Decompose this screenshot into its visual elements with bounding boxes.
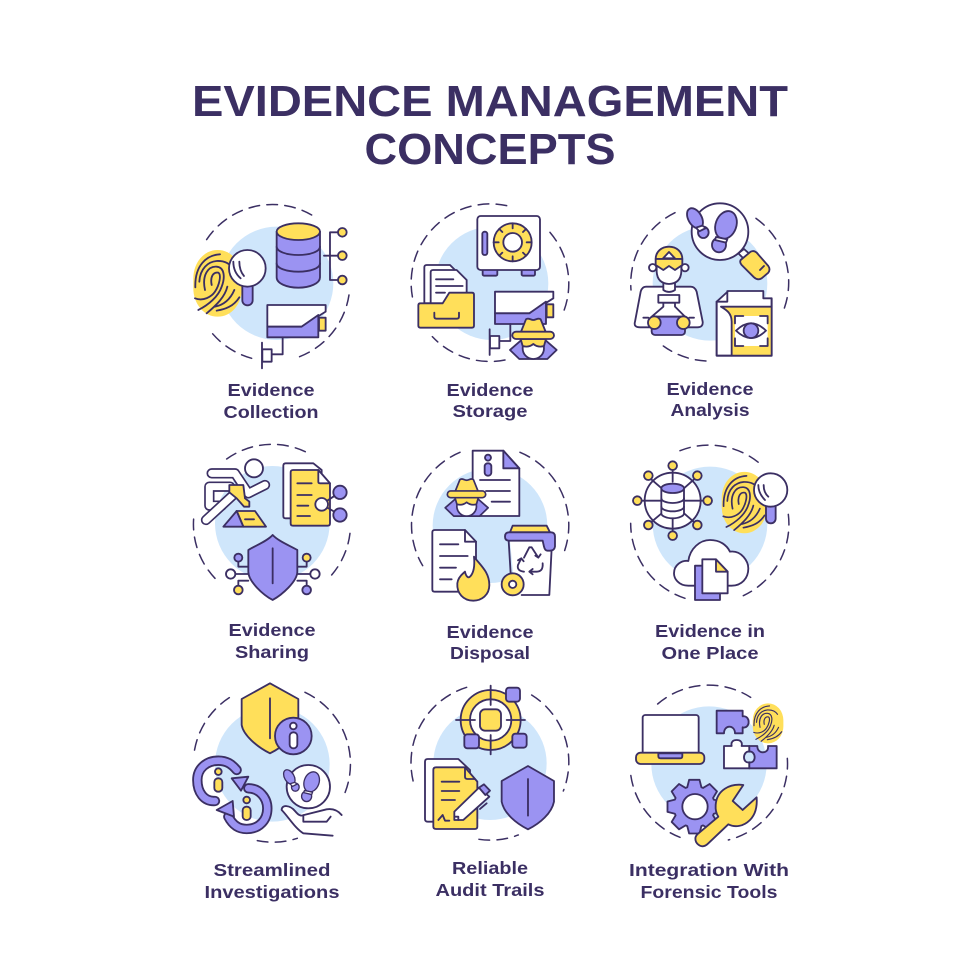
label: One Place xyxy=(662,643,759,663)
label: Evidence xyxy=(666,379,754,399)
label: Disposal xyxy=(450,643,530,663)
icon: puzzle pieces xyxy=(717,711,777,768)
label: Integration With xyxy=(629,860,789,880)
label xyxy=(629,860,789,902)
icon: information document xyxy=(473,451,519,516)
label: Investigations xyxy=(204,882,340,902)
icon: shield with info xyxy=(242,683,312,754)
label: Forensic Tools xyxy=(640,882,778,902)
label: Storage xyxy=(452,401,528,421)
icon: shield with circuit xyxy=(226,535,320,600)
icon: info cycle xyxy=(197,761,267,829)
icon: hand holding footprints xyxy=(281,765,342,836)
label: Collection xyxy=(224,402,318,422)
label xyxy=(228,620,316,662)
label: Evidence xyxy=(228,380,315,400)
icon: signed document xyxy=(425,759,490,829)
label: Evidence xyxy=(446,622,534,642)
icon: target xyxy=(456,686,527,754)
illustration: evidence collection xyxy=(193,205,349,368)
title xyxy=(192,77,788,174)
illustration: evidence in one place xyxy=(631,445,789,600)
label xyxy=(224,380,318,422)
icon: shield xyxy=(502,766,554,829)
icon: magnifier with footprints xyxy=(684,203,769,279)
label: Streamlined xyxy=(214,860,330,880)
title: CONCEPTS xyxy=(364,125,616,174)
panel: Evidence in One Place xyxy=(631,445,789,663)
icon: cloud with documents xyxy=(674,540,748,600)
panel: Reliable Audit Trails xyxy=(411,686,569,900)
panel: Evidence Analysis xyxy=(631,203,789,420)
icon: fingerprint xyxy=(753,703,783,743)
label xyxy=(204,860,340,902)
icon: burning document xyxy=(432,530,489,601)
panel: Evidence Storage xyxy=(411,204,569,421)
icon: database network xyxy=(633,461,712,540)
illustration: evidence sharing xyxy=(193,444,350,600)
icon: fingerprint with magnifier xyxy=(722,472,787,533)
panel: Evidence Collection xyxy=(193,205,349,422)
illustration: evidence disposal xyxy=(412,451,569,601)
label: Reliable xyxy=(452,858,528,878)
panel: Integration With Forensic Tools xyxy=(629,685,789,902)
label: Evidence in xyxy=(655,621,765,641)
icon: security camera xyxy=(490,292,553,355)
illustration: streamlined investigations xyxy=(194,683,350,842)
label: Analysis xyxy=(670,400,750,420)
icon: spy xyxy=(445,479,488,516)
illustration: integration with forensic tools xyxy=(631,685,788,846)
icon: laptop xyxy=(636,715,704,764)
label xyxy=(666,379,754,420)
label: Evidence xyxy=(228,620,316,640)
icon: investigator xyxy=(635,247,703,335)
illustration: evidence storage xyxy=(411,204,569,361)
icon: eye scan document xyxy=(717,291,772,356)
label xyxy=(436,858,545,900)
illustration: reliable audit trails xyxy=(411,686,569,840)
panel: Evidence Disposal xyxy=(412,451,569,663)
label xyxy=(655,621,765,663)
illustration: evidence analysis xyxy=(631,203,789,361)
panel: Streamlined Investigations xyxy=(194,683,350,902)
icon: shared documents xyxy=(283,463,347,526)
label xyxy=(446,380,534,421)
label: Sharing xyxy=(235,642,309,662)
icon: safe xyxy=(477,216,540,276)
icon: folder with documents xyxy=(418,265,474,328)
label: Evidence xyxy=(446,380,534,400)
icon: spy xyxy=(510,319,557,359)
title: EVIDENCE MANAGEMENT xyxy=(192,77,788,126)
icon: fingerprint with magnifier xyxy=(193,250,266,317)
label xyxy=(446,622,534,663)
icon: gear and wrench xyxy=(667,780,757,846)
icon: recycling bin xyxy=(502,526,555,595)
icon: database xyxy=(277,223,347,288)
label: Audit Trails xyxy=(436,880,545,900)
panel: Evidence Sharing xyxy=(193,444,350,662)
icon: security camera xyxy=(262,305,326,368)
icon: running figure with evidence marker xyxy=(206,459,266,527)
